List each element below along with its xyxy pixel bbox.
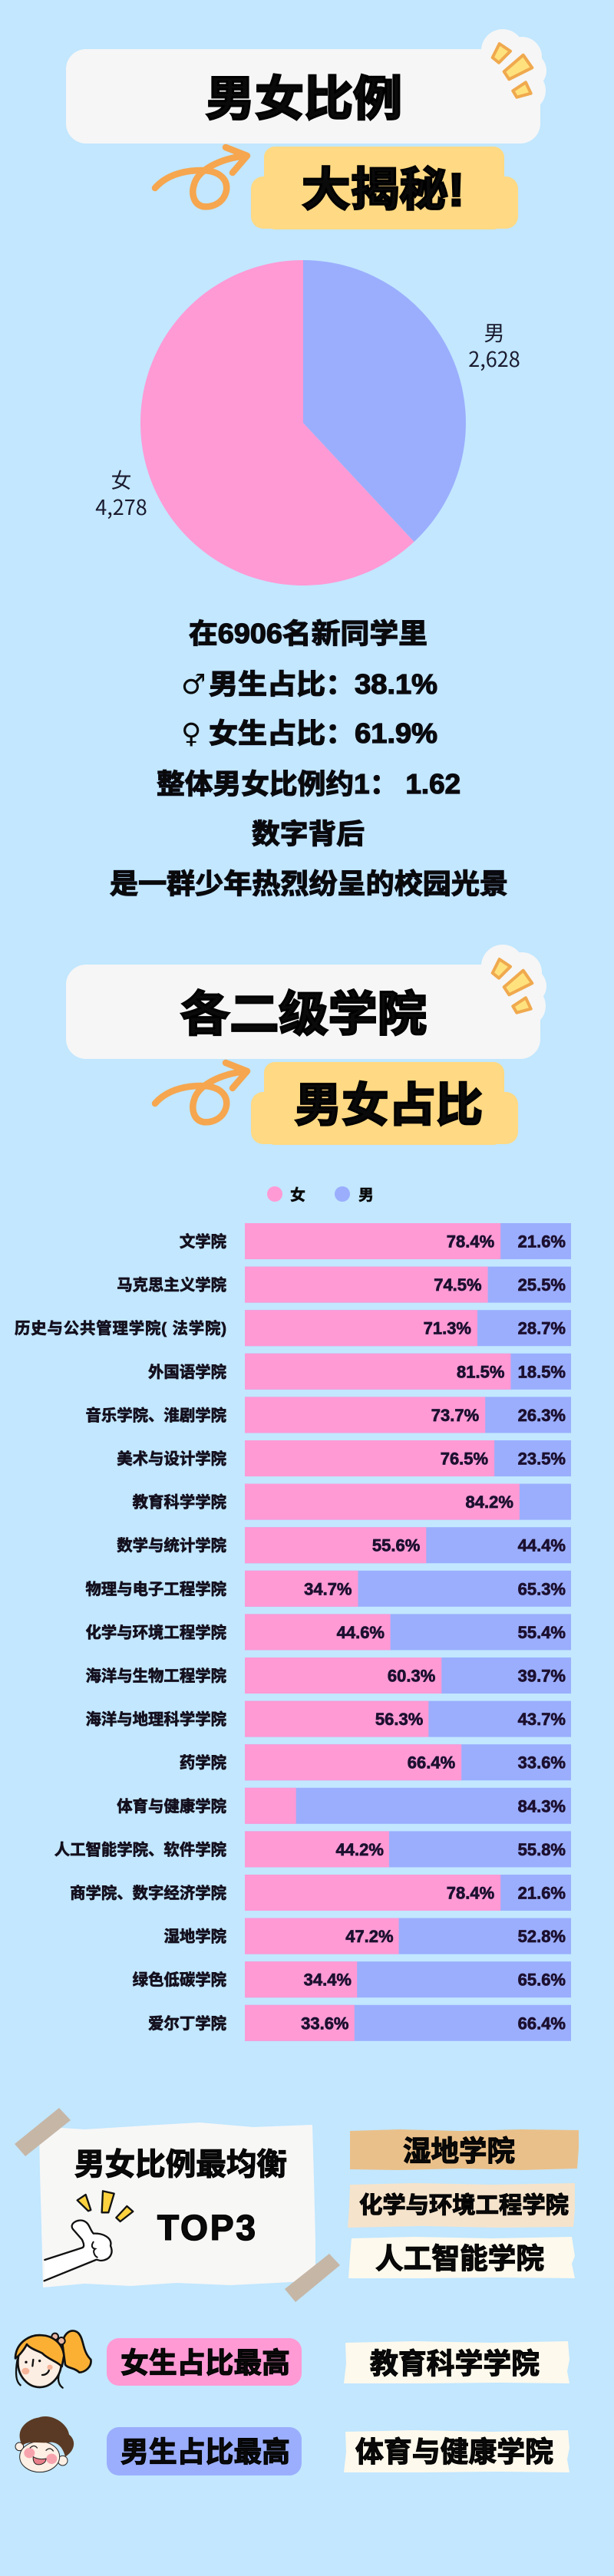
- strip: 体育与健康学院: 体育与健康学院: [355, 2436, 553, 2468]
- row: 海洋与地理科学学院: 56.3%: [375, 1710, 423, 1729]
- row: 绿色低碳学院: 34.4%: [304, 1971, 352, 1990]
- row: 爱尔丁学院: 33.6%: [301, 2014, 348, 2033]
- row: 外国语学院: 外国语学院: [148, 1363, 226, 1381]
- text block: summary: ♀: [181, 718, 201, 750]
- row: 美术与设计学院: 23.5%: [518, 1449, 566, 1469]
- panel: TOP3 note: [15, 2108, 340, 2302]
- row: 海洋与地理科学学院: 海洋与地理科学学院: [85, 1710, 226, 1729]
- row: 文学院: 78.4%: [447, 1232, 494, 1251]
- row: 马克思主义学院: [117, 1267, 571, 1303]
- row: 湿地学院: 52.8%: [518, 1927, 566, 1946]
- row: 数学与统计学院: 数学与统计学院: [117, 1536, 226, 1555]
- row: 教育科学学院: 教育科学学院: [133, 1493, 226, 1512]
- stacked bar chart: [15, 1223, 571, 2041]
- torn paper: [39, 2122, 315, 2287]
- legend: 男: [358, 1187, 374, 1204]
- row: 药学院: 药学院: [180, 1753, 226, 1772]
- row: 体育与健康学院: [117, 1788, 571, 1824]
- row: 音乐学院、淮剧学院: 73.7%: [431, 1406, 479, 1425]
- row: 化学与环境工程学院: 44.6%: [337, 1623, 385, 1642]
- row: 药学院: 33.6%: [518, 1753, 566, 1773]
- row: 人工智能学院、软件学院: [54, 1831, 571, 1867]
- row: 化学与环境工程学院: [85, 1614, 571, 1650]
- title panel: [66, 49, 540, 143]
- row: 马克思主义学院: 25.5%: [518, 1275, 566, 1295]
- heading text: 男女比例最均衡: [74, 2148, 287, 2182]
- row: 历史与公共管理学院: 28.7%: [518, 1319, 566, 1338]
- row: 药学院: 66.4%: [408, 1753, 455, 1773]
- row: 体育与健康学院: 84.3%: [518, 1796, 566, 1816]
- strip: 人工智能学院: 人工智能学院: [375, 2243, 544, 2274]
- strip: 体育与健康学院: [344, 2430, 569, 2472]
- text block: summary: ♂: [181, 669, 206, 701]
- row: 人工智能学院、软件学院: 55.8%: [518, 1840, 566, 1859]
- title panel: [66, 965, 540, 1059]
- row: 海洋与生物工程学院: 60.3%: [388, 1667, 435, 1685]
- row: 物理与电子工程学院: 65.3%: [518, 1579, 566, 1598]
- text block: summary: 男生占比：38.1%: [209, 668, 437, 700]
- label: 女 4,278: 女: [111, 464, 132, 494]
- icon: girl face: [15, 2330, 91, 2388]
- arrow: [155, 1063, 247, 1122]
- sparkle icon: [493, 44, 532, 97]
- label: 女生占比最高: 女生占比最高: [120, 2347, 290, 2379]
- row: 爱尔丁学院: 爱尔丁学院: [148, 2014, 226, 2033]
- subtitle text: 男女占比: [295, 1080, 483, 1131]
- row: 历史与公共管理学院: [15, 1310, 571, 1346]
- row: 湿地学院: 湿地学院: [163, 1928, 226, 1946]
- row: 文学院: 21.6%: [518, 1232, 566, 1251]
- row: 海洋与地理科学学院: 43.7%: [518, 1710, 566, 1729]
- label: 男生占比最高: 男生占比最高: [120, 2436, 290, 2468]
- row: 文学院: 文学院: [180, 1232, 226, 1251]
- row: 化学与环境工程学院: 化学与环境工程学院: [85, 1623, 226, 1641]
- text block: summary: 数字背后: [252, 818, 365, 849]
- strip: 教育科学学院: [344, 2341, 569, 2383]
- icon: thumbs up: [45, 2191, 133, 2281]
- row: 教育科学学院: 84.2%: [466, 1492, 513, 1512]
- strip: 教育科学学院: 教育科学学院: [370, 2348, 540, 2380]
- row: 爱尔丁学院: 66.4%: [518, 2014, 566, 2033]
- text block: summary: 在6906名新同学里: [189, 618, 427, 649]
- row: 湿地学院: 47.2%: [345, 1927, 394, 1946]
- row: 湿地学院: [163, 1918, 571, 1954]
- strip: 湿地学院: 湿地学院: [403, 2136, 515, 2167]
- row: 物理与电子工程学院: [85, 1571, 571, 1607]
- row: 海洋与生物工程学院: 海洋与生物工程学院: [85, 1667, 226, 1685]
- row: 文学院: [180, 1223, 571, 1259]
- text block: summary: [110, 618, 508, 899]
- tape: bottom: [285, 2254, 340, 2302]
- icon: boy face: [15, 2416, 74, 2472]
- legend: 女: [290, 1186, 305, 1204]
- label: 女 4,278: 4,278: [95, 491, 147, 521]
- row: 历史与公共管理学院: 71.3%: [424, 1319, 471, 1338]
- yellow subtitle panel: [251, 147, 518, 229]
- strip: 化学与环境工程学院: 化学与环境工程学院: [359, 2192, 569, 2218]
- row: 美术与设计学院: 美术与设计学院: [117, 1450, 226, 1468]
- row: 绿色低碳学院: 绿色低碳学院: [133, 1971, 226, 1989]
- strip: 湿地学院: [350, 2129, 579, 2170]
- row: 音乐学院、淮剧学院: [85, 1397, 571, 1433]
- row: 商学院、数字经济学院: [70, 1875, 571, 1911]
- label: 男 2,628: 男: [484, 317, 505, 347]
- row: 外国语学院: [148, 1354, 571, 1390]
- row: 海洋与生物工程学院: [85, 1657, 571, 1694]
- strip: 人工智能学院: [348, 2237, 575, 2278]
- pie chart: [95, 260, 520, 585]
- row: 音乐学院、淮剧学院: 音乐学院、淮剧学院: [85, 1406, 226, 1424]
- row: 商学院、数字经济学院: 78.4%: [447, 1883, 494, 1903]
- row: 历史与公共管理学院: 历史与公共管理学院( 法学院): [15, 1319, 226, 1337]
- text block: summary: 是一群少年热烈纷呈的校园光景: [110, 868, 508, 899]
- row: 人工智能学院、软件学院: 人工智能学院、软件学院: [54, 1840, 226, 1859]
- row: 绿色低碳学院: [133, 1961, 571, 1997]
- row: 外国语学院: 81.5%: [457, 1362, 504, 1381]
- row: 绿色低碳学院: 65.6%: [518, 1971, 566, 1990]
- title text: 男女比例: [206, 73, 402, 126]
- row: 商学院、数字经济学院: 21.6%: [518, 1883, 566, 1903]
- arrow: [155, 147, 247, 206]
- sparkle backing: [481, 945, 546, 1027]
- row: 商学院、数字经济学院: 商学院、数字经济学院: [70, 1884, 226, 1902]
- strip: 化学与环境工程学院: [348, 2183, 575, 2228]
- heading: 各二级学院男女占比: [66, 945, 546, 1145]
- row: 体育与健康学院: 体育与健康学院: [117, 1797, 226, 1816]
- yellow subtitle panel: [251, 1062, 518, 1145]
- row: 化学与环境工程学院: 55.4%: [518, 1623, 566, 1642]
- TOP3 text: TOP3: [157, 2208, 256, 2248]
- row: 海洋与地理科学学院: [85, 1701, 571, 1737]
- row: 药学院: [180, 1744, 571, 1780]
- row: 爱尔丁学院: [148, 2005, 571, 2041]
- slice: 男: [303, 260, 466, 542]
- legend: [267, 1186, 374, 1204]
- label: 男 2,628: 2,628: [468, 343, 520, 373]
- row: 马克思主义学院: 马克思主义学院: [117, 1276, 226, 1295]
- subtitle text: 大揭秘!: [302, 164, 464, 216]
- row: 马克思主义学院: 74.5%: [434, 1275, 482, 1295]
- heading: 男女比例大揭秘: [66, 29, 546, 229]
- label: 男 2,628: [468, 317, 520, 373]
- title text: 各二级学院: [180, 988, 427, 1041]
- row: 音乐学院、淮剧学院: 26.3%: [518, 1406, 566, 1425]
- row: 外国语学院: 18.5%: [518, 1362, 566, 1381]
- row: 数学与统计学院: 44.4%: [518, 1536, 566, 1555]
- sparkle icon: [493, 959, 532, 1013]
- row: 美术与设计学院: [117, 1440, 571, 1476]
- row: 人工智能学院、软件学院: 44.2%: [336, 1840, 384, 1859]
- sparkle backing: [481, 29, 546, 111]
- row: 数学与统计学院: 55.6%: [372, 1536, 420, 1555]
- tape: top: [15, 2108, 71, 2156]
- row: 海洋与生物工程学院: 39.7%: [518, 1667, 566, 1685]
- row: 教育科学学院: [133, 1484, 571, 1520]
- row: 物理与电子工程学院: 34.7%: [304, 1579, 352, 1598]
- text block: summary: 整体男女比例约1： 1.62: [157, 768, 460, 800]
- row: 美术与设计学院: 76.5%: [441, 1449, 488, 1469]
- row: 数学与统计学院: [117, 1527, 571, 1563]
- label: 女 4,278: [95, 464, 147, 521]
- label: 女生占比最高: [107, 2338, 302, 2386]
- slice: 女: [140, 260, 414, 585]
- row: 物理与电子工程学院: 物理与电子工程学院: [85, 1580, 226, 1598]
- label: 男生占比最高: [107, 2427, 302, 2475]
- text block: summary: 女生占比：61.9%: [209, 717, 437, 749]
